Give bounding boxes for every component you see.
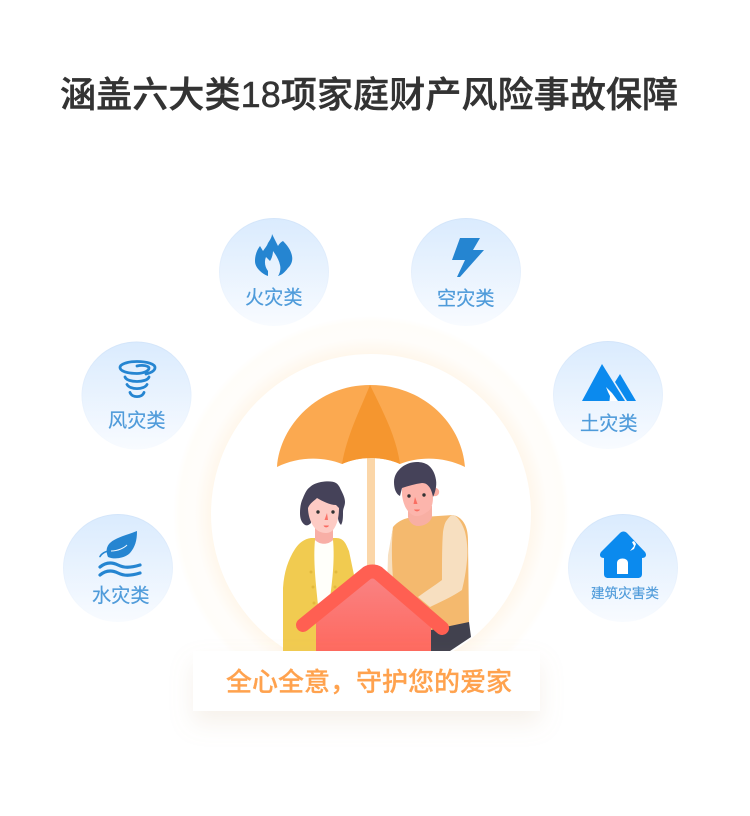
badge: wind — [82, 342, 191, 449]
badge: earth — [554, 342, 662, 448]
banner: 全心全意，守护您的爱家 — [226, 667, 512, 697]
icon: tornado — [120, 362, 155, 397]
woman — [283, 481, 354, 660]
label: 土灾类 — [580, 413, 638, 435]
badge: water — [64, 514, 172, 622]
banner — [193, 651, 540, 711]
label: 风灾类 — [108, 410, 166, 432]
man — [387, 462, 471, 660]
title: 涵盖六大类18项家庭财产风险事故保障 — [60, 74, 678, 115]
icon: lightning bolt — [452, 238, 484, 277]
umbrella pole — [367, 458, 375, 566]
icon: flame — [255, 234, 292, 276]
label: 空灾类 — [437, 288, 495, 310]
illustration: family under umbrella — [277, 385, 471, 660]
badge: building — [568, 514, 678, 622]
badge: sky — [412, 218, 520, 326]
label: 水灾类 — [92, 585, 150, 607]
icon: mountains — [582, 364, 636, 401]
label: 建筑灾害类 — [591, 585, 659, 601]
red house — [303, 572, 442, 660]
central halo circle — [173, 316, 569, 712]
badge: fire — [220, 218, 328, 326]
umbrella canopy — [277, 385, 465, 467]
icon: cracked house — [600, 532, 646, 578]
label: 火灾类 — [245, 287, 303, 309]
icon: leaf and waves — [100, 531, 140, 575]
